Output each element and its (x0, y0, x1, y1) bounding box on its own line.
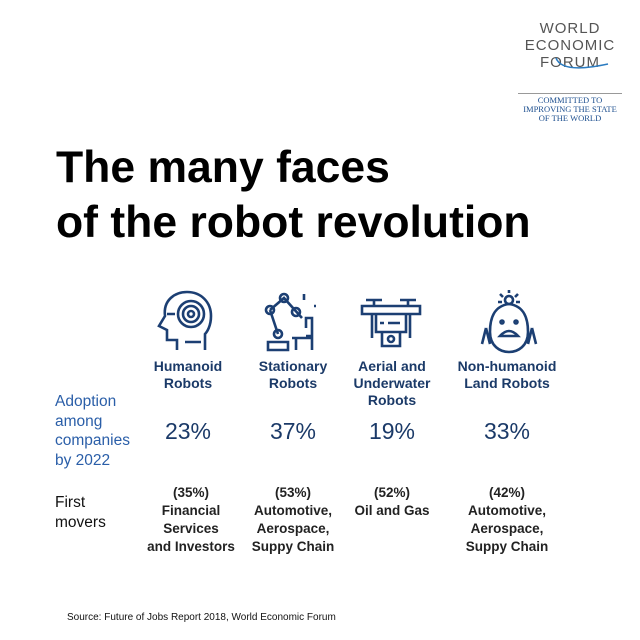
icon: non-humanoid land robot (480, 290, 538, 354)
source: Source: Future of Jobs Report 2018, World Economic Forum (67, 612, 336, 623)
label: adoption: companies (55, 432, 130, 449)
percentages: 37% (270, 418, 316, 444)
label: adoption (55, 393, 130, 468)
icon: drone (360, 298, 422, 348)
logo: World Economic Forum: FORUM (540, 54, 600, 71)
first movers values: Oil and Gas (354, 503, 430, 518)
first movers values: Suppy Chain (252, 539, 334, 554)
label: adoption: by 2022 (55, 452, 110, 468)
first movers values: (35%) (173, 485, 209, 500)
percentages: 33% (484, 418, 530, 444)
label: first movers: First (55, 494, 85, 511)
heading: Humanoid Robots (154, 358, 222, 391)
logo: World Economic Forum: ECONOMIC (525, 37, 615, 54)
heading: Aerial and Underwater Robots: Robots (368, 392, 416, 408)
first movers values: Financial (162, 503, 220, 518)
percentages: 19% (369, 418, 415, 444)
first movers values: and Investors (147, 539, 235, 554)
heading: Aerial and Underwater Robots: Underwater (353, 375, 431, 391)
heading: Humanoid Robots: Humanoid (154, 358, 222, 374)
logo: World Economic Forum: WORLD (540, 20, 600, 37)
first movers values: Automotive, (254, 503, 332, 518)
logo: World Economic Forum (518, 20, 622, 123)
first movers values: (53%) (275, 485, 311, 500)
title: of the robot revolution (56, 198, 531, 247)
title (56, 143, 531, 247)
heading: Stationary Robots (259, 358, 328, 391)
first movers values: (42%) (489, 485, 525, 500)
logo: World Economic Forum: COMMITTED TO (538, 95, 602, 105)
heading: Aerial and Underwater Robots (353, 358, 431, 408)
label: first movers (55, 494, 106, 530)
heading: Stationary Robots: Stationary (259, 358, 327, 374)
label: first movers: movers (55, 514, 106, 530)
icon: stationary robot (264, 292, 316, 352)
first movers values: Aerospace, (471, 521, 543, 536)
heading: Stationary Robots: Robots (269, 375, 317, 391)
heading: Non-humanoid Land Robots: Land Robots (464, 375, 550, 391)
first movers values: Automotive, (468, 503, 546, 518)
percentages: 23% (165, 418, 211, 444)
first movers values: Suppy Chain (466, 539, 548, 554)
logo: World Economic Forum: IMPROVING THE STATE (523, 104, 617, 114)
first movers values: Services (163, 521, 219, 536)
first movers values: Aerospace, (257, 521, 329, 536)
title: The many faces (56, 143, 390, 192)
heading: Non-humanoid Land Robots (458, 358, 556, 391)
heading: Humanoid Robots: Robots (164, 375, 212, 391)
label: adoption: Adoption (55, 393, 116, 410)
logo: World Economic Forum: OF THE WORLD (539, 113, 601, 123)
label: adoption: among (55, 412, 102, 430)
icon: humanoid robot (157, 290, 212, 350)
first movers values: (52%) (374, 485, 410, 500)
heading: Aerial and Underwater Robots: Aerial and (358, 358, 426, 374)
heading: Non-humanoid Land Robots: Non-humanoid (458, 358, 556, 374)
